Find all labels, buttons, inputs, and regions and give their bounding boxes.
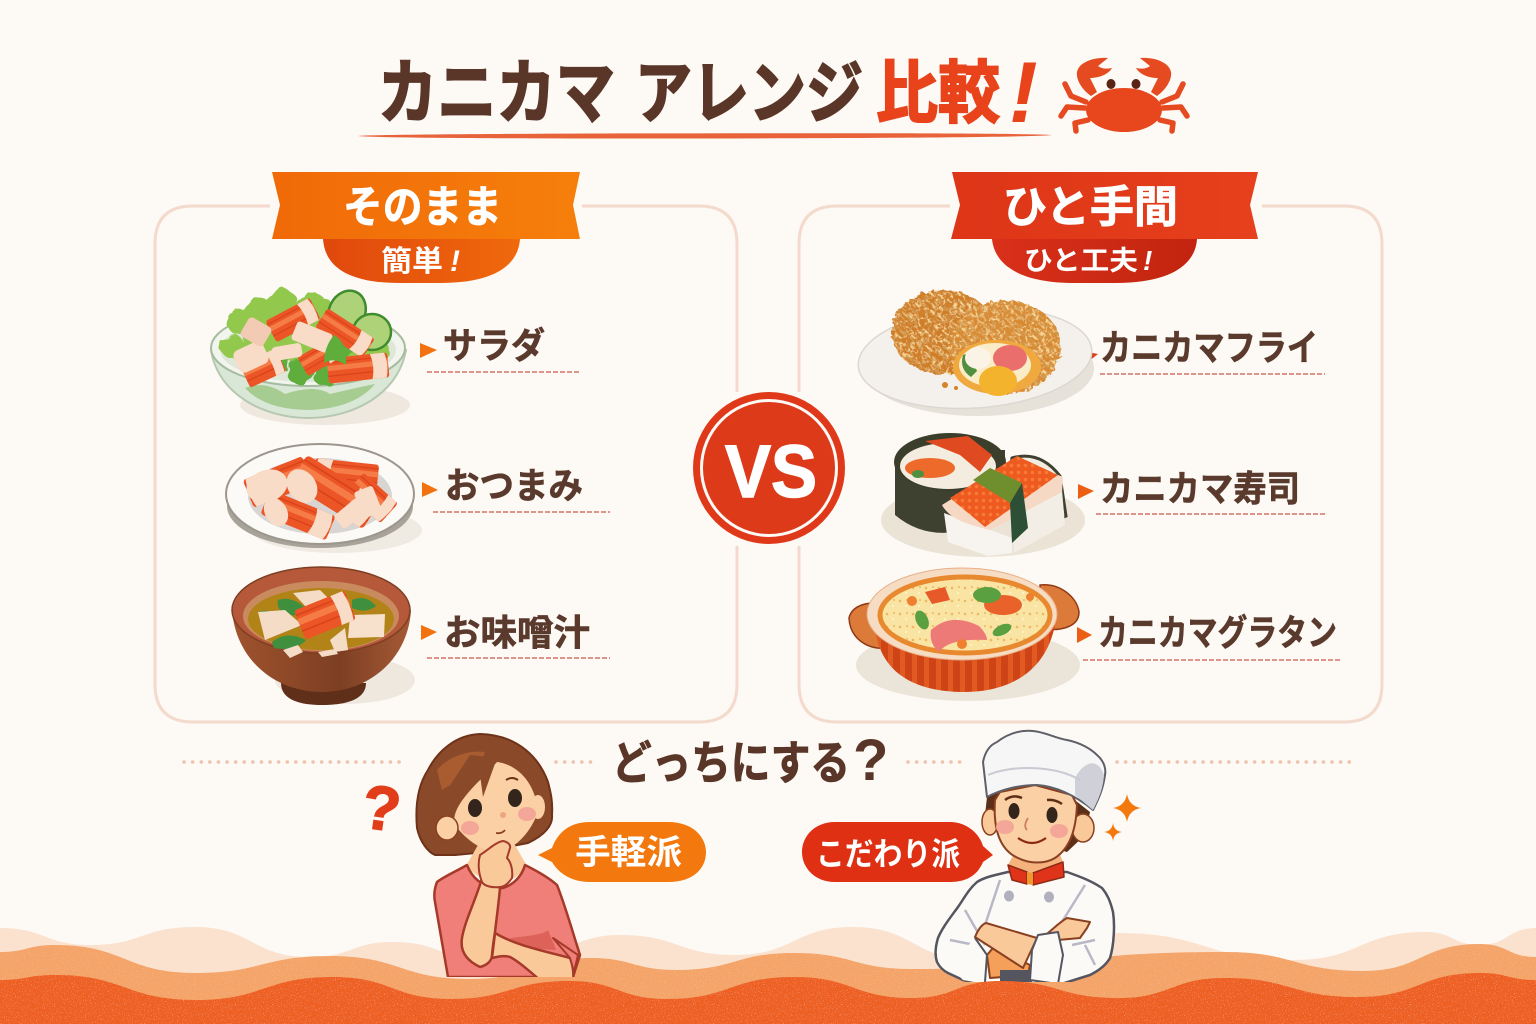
face (995, 785, 1077, 862)
neck (467, 845, 526, 880)
dotted lines (184, 760, 1357, 764)
label: おつまみ: おつまみ (445, 465, 583, 506)
ears (982, 809, 1094, 842)
label: カニカマ寿司: カニカマ寿司 (1100, 468, 1300, 509)
jacket (936, 872, 1114, 985)
sub label: 簡単！: ! (450, 245, 460, 278)
wave: front orange layer (0, 973, 1536, 1024)
VS badge (693, 392, 845, 544)
hair highlight (437, 752, 485, 790)
item arrow (420, 343, 437, 358)
wave: pale back layer (0, 927, 1536, 1024)
question heading: ? (853, 728, 888, 793)
question heading: どっちにする (612, 737, 850, 789)
food: kanikama fry (855, 290, 1095, 416)
panel: ひと手間 (799, 172, 1382, 722)
neck (1008, 855, 1063, 873)
food: snack plate (226, 444, 422, 553)
wave: mid orange layer (0, 944, 1536, 1024)
eyes and cheeks (461, 778, 536, 835)
banner: ひと手間: ひと手間 (1003, 183, 1178, 232)
collar (1008, 862, 1064, 885)
banner: ひと手間 (951, 172, 1258, 239)
item arrow (1077, 627, 1092, 643)
hat (983, 731, 1105, 810)
speech bubble: 手軽派 (538, 822, 706, 882)
hair back (416, 734, 552, 855)
item arrow (422, 482, 438, 497)
ears (436, 795, 545, 840)
sub label: ひと工夫！ (992, 239, 1197, 283)
title text: red accent: 比較 (876, 56, 1000, 132)
jacket folds (950, 880, 1095, 965)
item arrow (421, 625, 437, 640)
speech bubble: こだわり派: こだわり派 (816, 836, 960, 872)
icon: sparkles (1104, 794, 1141, 841)
label: サラダ: サラダ (443, 325, 545, 366)
face details (996, 796, 1068, 843)
label: カニカマグラタン: カニカマグラタン (1098, 612, 1337, 653)
title text: dark part 2: アレンジ (635, 56, 863, 132)
label: カニカマフライ: カニカマフライ (1100, 327, 1318, 368)
food: miso soup (232, 567, 415, 705)
panel frame right (799, 206, 1382, 722)
shirt (434, 865, 580, 977)
sub label: ひと工夫！: ! (1143, 245, 1152, 276)
crossed arms (950, 918, 1090, 984)
item arrow (1083, 351, 1098, 361)
sleeve (553, 938, 578, 972)
speech bubble: こだわり派 (802, 822, 993, 882)
banner: そのまま: そのまま (343, 183, 502, 232)
sub label: 簡単！: 簡単 (381, 245, 443, 278)
character: chef (936, 731, 1114, 985)
food: kanikama sushi (881, 433, 1085, 557)
sub label: ひと工夫！: ひと工夫 (1024, 246, 1138, 276)
lower arm (492, 933, 573, 980)
item arrow (1078, 484, 1094, 499)
shirt shade (510, 930, 556, 950)
panel: そのまま (155, 172, 737, 722)
face (454, 762, 538, 851)
raised arm (462, 875, 500, 967)
sub label: 簡単！ (323, 239, 520, 283)
hair back (985, 790, 1090, 852)
panel frame left (155, 206, 737, 722)
label: お味噌汁: お味噌汁 (444, 612, 590, 653)
bangs strand (450, 755, 495, 797)
icon: crab (1061, 58, 1187, 132)
title exclamation: ! (1009, 45, 1038, 141)
buttons (1004, 890, 1054, 902)
question mark: ? (358, 772, 405, 846)
banner: そのまま (272, 172, 580, 239)
title underline (358, 133, 1052, 139)
food: salad (211, 284, 410, 425)
title (358, 45, 1052, 141)
hand (479, 841, 512, 887)
character: woman (416, 734, 580, 980)
food: kanikama gratin (849, 568, 1080, 701)
title text: dark part: カニカマ (378, 54, 615, 132)
speech bubble: 手軽派: 手軽派 (575, 834, 682, 872)
VS badge: VS (725, 430, 817, 513)
